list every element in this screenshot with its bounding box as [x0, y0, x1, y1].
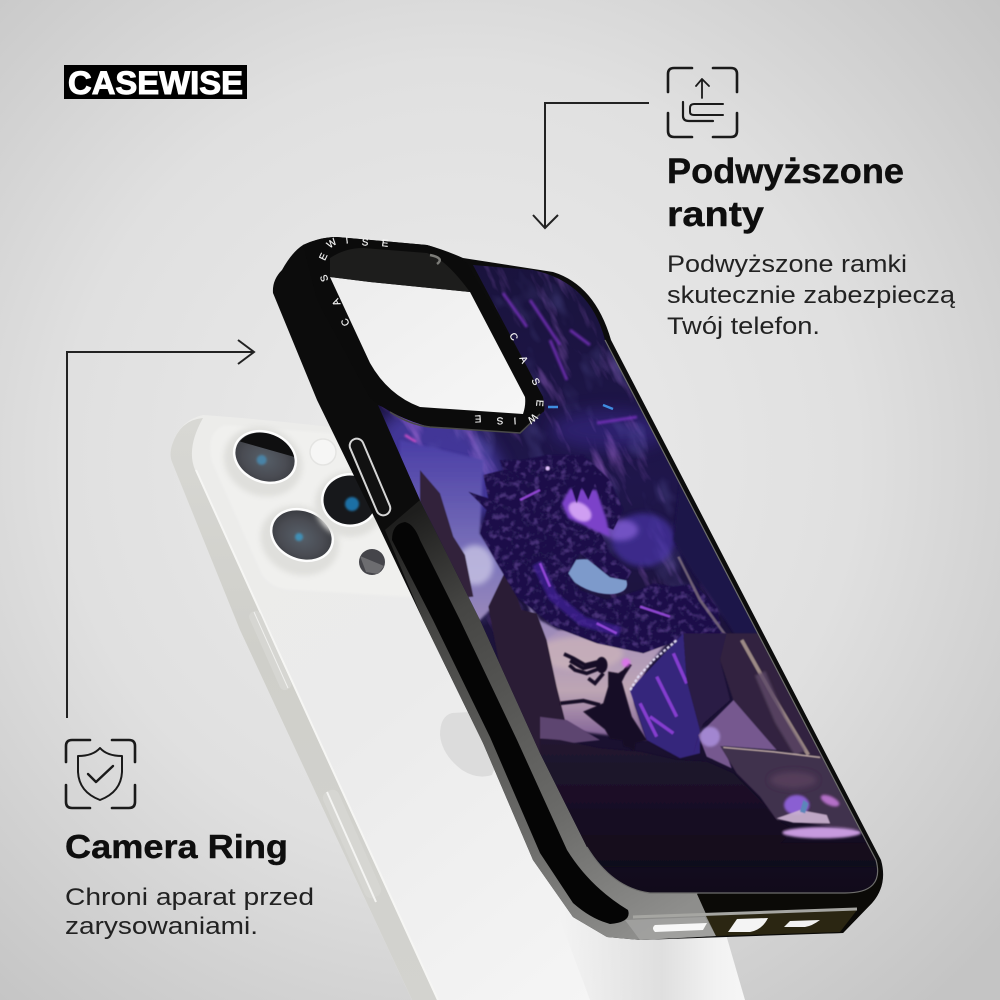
mouth glow [562, 488, 610, 537]
text: camera ring description: Chroni aparat przed [65, 884, 314, 911]
ring lettering: C [506, 331, 520, 343]
port: centre [728, 918, 768, 932]
ring lettering: S [529, 377, 542, 388]
camera ring [303, 235, 545, 433]
text: raised edges description [667, 251, 956, 340]
screen rim [587, 340, 878, 893]
dragon scene lower [540, 632, 862, 847]
glows [784, 795, 809, 815]
dragon texture [472, 454, 722, 652]
sky [400, 440, 647, 723]
pale streak [677, 556, 726, 634]
ring lettering: C [340, 316, 352, 328]
pink band [782, 827, 861, 838]
ring lettering: E [381, 238, 389, 250]
lens: right [315, 471, 385, 537]
ring lettering: E [318, 251, 331, 262]
logo: CASEWISE: CASEWISE [68, 65, 243, 101]
volume button [348, 437, 392, 517]
heading: Camera Ring: Camera Ring [65, 828, 288, 865]
case outer shell [273, 237, 883, 940]
icon: shield [66, 740, 135, 808]
right pillars [720, 633, 823, 757]
camera plateau [210, 425, 440, 597]
flash [310, 439, 336, 465]
text: raised edges description: Podwyższone ramki [667, 251, 907, 278]
phone case [273, 237, 883, 940]
ring lettering: A [517, 355, 530, 366]
text: camera ring description [65, 884, 314, 940]
lens: top [213, 415, 313, 508]
ring lettering: S [361, 237, 369, 249]
ring lettering: W [325, 236, 339, 251]
ground [540, 738, 782, 847]
ring lettering: S [496, 414, 504, 426]
scaled tail [630, 633, 700, 758]
ring lettering: W [524, 411, 539, 426]
moon patch [568, 558, 628, 595]
text: raised edges description: skutecznie zabezpieczą [667, 282, 956, 309]
left rock [420, 470, 473, 598]
heading: Podwyższone ranty: Podwyższone [667, 152, 904, 191]
port: right [784, 920, 820, 927]
side buttons [247, 609, 383, 902]
camera window [330, 277, 525, 414]
wizard silhouette [560, 654, 647, 751]
heading: Podwyższone ranty: ranty [667, 195, 765, 234]
sensor [359, 549, 385, 575]
ring lettering: I [513, 414, 517, 426]
sky behind wizard [552, 628, 668, 742]
dragon scene upper [400, 440, 760, 770]
port: left [653, 923, 707, 932]
lens: bottom [250, 494, 350, 587]
ledge [720, 746, 863, 830]
right nebula [612, 513, 675, 567]
screen artwork [378, 265, 877, 892]
dark right sky [672, 494, 757, 633]
dark mass [683, 632, 730, 730]
ring lettering: I [345, 235, 349, 247]
clear lower bezel [385, 500, 716, 940]
text: raised edges description: Twój telefon. [667, 313, 820, 340]
inner wall [330, 248, 470, 292]
nebula [381, 266, 720, 705]
text: camera ring description: zarysowaniami. [65, 913, 258, 940]
ring lettering [318, 235, 545, 426]
dragon [468, 455, 727, 653]
ring lettering: E [533, 399, 545, 407]
ring lettering: A [330, 296, 343, 307]
rock spire [488, 574, 566, 752]
icon: raised edges [668, 68, 737, 137]
side black strip [392, 522, 629, 924]
white phone [170, 415, 745, 1000]
light wedge [698, 700, 777, 768]
ring lettering: E [474, 412, 482, 424]
apple logo shadow [440, 712, 510, 777]
ring lettering: S [319, 273, 331, 283]
arrow: raised edges [533, 103, 649, 228]
bottom wall right [697, 860, 882, 936]
heading: Podwyższone ranty [667, 152, 904, 234]
arrow: camera ring [67, 340, 254, 718]
